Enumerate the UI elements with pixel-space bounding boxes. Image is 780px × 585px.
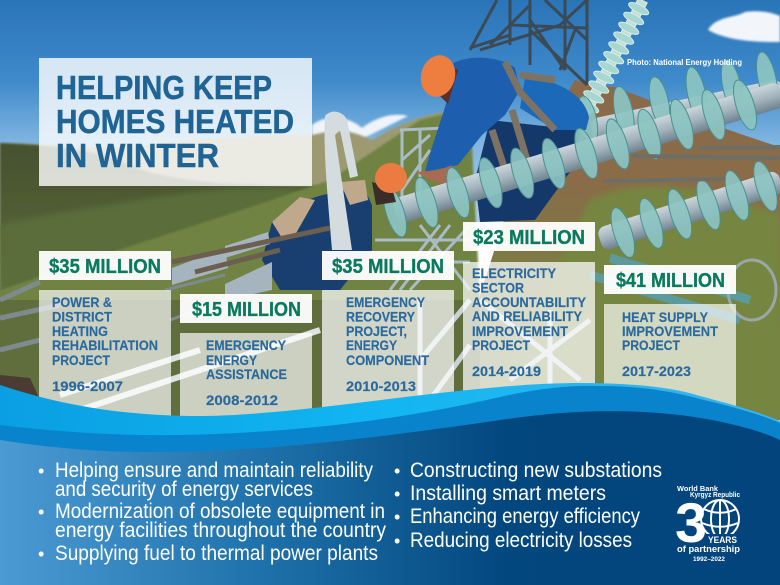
tower — [470, 0, 587, 85]
corona ring — [728, 260, 776, 320]
photo credit: Photo: National Energy Holding — [627, 58, 742, 67]
icon: globe — [701, 500, 739, 538]
hands — [416, 165, 452, 185]
project card 2 — [180, 294, 312, 420]
description 4: AND RELIABILITY — [472, 309, 582, 324]
helmet: kneeling worker — [375, 163, 407, 193]
amount 5 — [604, 265, 736, 294]
upper insulator string — [573, 49, 780, 147]
description 5: PROJECT — [622, 338, 681, 353]
bullet list: left column — [38, 459, 386, 565]
title line 3: IN WINTER — [56, 137, 219, 174]
main insulator string — [379, 69, 780, 239]
steel rods right — [603, 147, 780, 181]
bullet list: left column: • — [38, 544, 44, 564]
amount 3: $35 MILLION — [332, 256, 444, 278]
sky — [0, 0, 780, 230]
left hardware — [0, 275, 225, 350]
description 3: RECOVERY — [346, 310, 415, 324]
hills: right brown — [440, 80, 780, 420]
bullet list: right column: Installing smart meters — [410, 482, 606, 505]
amount 5: $41 MILLION — [616, 270, 725, 292]
hardware brackets — [172, 232, 272, 300]
description 3: ENERGY — [346, 338, 397, 353]
description 5: HEAT SUPPLY — [622, 310, 708, 325]
diagonal insulator string — [576, 0, 653, 117]
description 3: 2010-2013 — [346, 379, 417, 394]
project card 4 — [463, 222, 595, 392]
lattice frame — [375, 128, 470, 290]
description 1: PROJECT — [52, 353, 111, 368]
lower-left clamp — [0, 375, 40, 400]
title line 1: HELPING KEEP — [56, 69, 272, 106]
ground: left bottom field — [0, 300, 480, 420]
description 1: DISTRICT — [52, 310, 113, 324]
hills: distant left — [0, 108, 470, 300]
description 3: COMPONENT — [346, 353, 430, 368]
description 2 — [180, 333, 312, 420]
description 4 — [463, 262, 595, 392]
years label: YEARS — [708, 535, 737, 546]
description 3 — [322, 290, 454, 415]
lower-center lattice — [420, 300, 590, 400]
amount 3 — [322, 251, 454, 280]
bullet list: left column: Helping ensure and maintain reliability — [55, 459, 373, 482]
description 2: 2008-2012 — [206, 393, 278, 408]
bullet list: left column: and security of energy services — [55, 478, 313, 501]
description 4: IMPROVEMENT — [472, 324, 569, 339]
kneeling worker body — [262, 190, 372, 290]
bullet list: right column — [394, 459, 662, 552]
bullet list: left column: • — [38, 461, 44, 481]
cloud: upper right — [708, 11, 780, 42]
logo: World Bank 30 years: of partnership — [677, 544, 740, 555]
bullet list: right column: Reducing electricity losses — [410, 529, 632, 552]
logo: World Bank 30 years: 1992–2022 — [693, 556, 725, 563]
description 1: 1996-2007 — [52, 379, 123, 394]
lower insulator string — [592, 157, 780, 265]
description 1: POWER & — [52, 295, 112, 310]
hills: bottom field — [480, 186, 780, 420]
amount 1 — [39, 251, 171, 280]
logo: World Bank 30 years: World Bank — [677, 484, 719, 493]
face: kneeling worker — [372, 182, 396, 205]
project card 3 — [322, 251, 454, 415]
harness straps — [492, 62, 555, 170]
bullet list: right column: Constructing new substations — [410, 459, 662, 482]
bullet list: right column: • — [394, 507, 400, 527]
description 4: 2014-2019 — [472, 364, 541, 379]
title line 2: HOMES HEATED — [56, 103, 294, 140]
bullet list: right column: • — [394, 484, 400, 504]
description 4: ACCOUNTABILITY — [472, 295, 586, 310]
amount 4 — [463, 222, 595, 251]
beige harness — [272, 180, 368, 238]
numeral 3: 3 — [675, 491, 707, 554]
title panel — [39, 58, 312, 186]
logo: World Bank 30 years — [675, 484, 740, 563]
description 2: EMERGENCY — [206, 338, 286, 353]
photo: line workers on insulators — [0, 0, 780, 420]
bullet list: left column: Modernization of obsolete equipment in — [55, 500, 385, 523]
wave: light blue — [0, 383, 780, 585]
description 5: 2017-2023 — [622, 364, 692, 379]
logo: World Bank 30 years: Kyrgyz Republic — [690, 490, 740, 499]
bullet list: left column: Supplying fuel to thermal power plants — [55, 542, 378, 565]
amount 4: $23 MILLION — [473, 227, 585, 249]
bullet list: right column: Enhancing energy efficiency — [410, 505, 640, 528]
description 3: PROJECT, — [346, 324, 407, 339]
description 1 — [39, 290, 171, 420]
bullet list: left column: • — [38, 502, 44, 522]
wave: dark footer — [0, 411, 780, 585]
bullet list: left column: energy facilities throughout the country — [55, 519, 386, 542]
hills: foreground left — [0, 108, 480, 420]
description 4: ELECTRICITY — [472, 266, 556, 281]
helmet: standing worker — [416, 51, 460, 101]
project card 5 — [604, 265, 736, 414]
description 5 — [604, 304, 736, 414]
cloud: behind workers — [312, 115, 408, 140]
description 4: SECTOR — [472, 280, 524, 296]
face — [438, 65, 458, 104]
description 2: ENERGY — [206, 353, 257, 368]
amount 1: $35 MILLION — [49, 256, 161, 278]
harness and trousers: standing worker — [475, 120, 580, 222]
description 5: IMPROVEMENT — [622, 324, 719, 339]
white lower insulators — [60, 330, 320, 410]
description 1: HEATING — [52, 324, 108, 339]
description 4: PROJECT — [472, 338, 531, 353]
hills: middle ridge — [0, 188, 315, 300]
steel bars — [172, 228, 330, 272]
jacket: standing worker — [425, 58, 520, 172]
bullet list: right column: • — [394, 531, 400, 551]
project card 1 — [39, 251, 171, 420]
lower teal rods — [590, 258, 750, 320]
description 3: EMERGENCY — [346, 295, 425, 310]
hills: dark left — [0, 143, 330, 300]
backpack — [520, 78, 589, 130]
white tube — [325, 112, 358, 250]
wave: mid blue — [0, 386, 780, 585]
description 2: ASSISTANCE — [206, 367, 287, 382]
amount 2: $15 MILLION — [192, 299, 301, 321]
description 1: REHABILITATION — [52, 338, 158, 353]
bullet list: right column: • — [394, 461, 400, 481]
